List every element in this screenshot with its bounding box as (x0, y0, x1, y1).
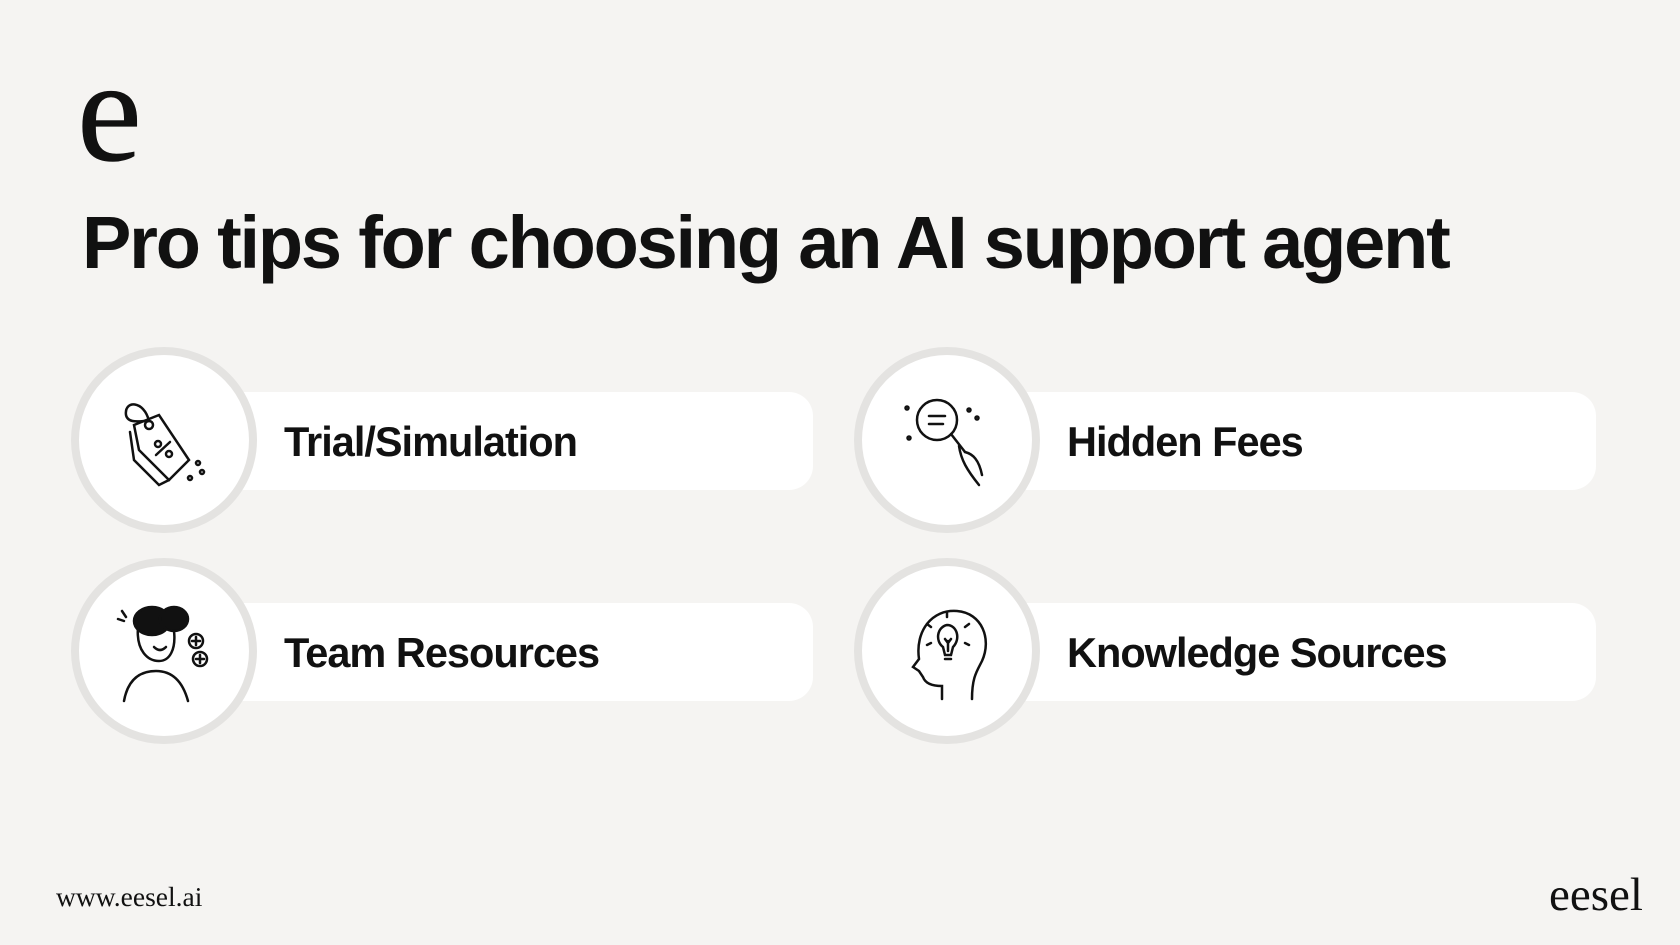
footer: url: www.eesel.ai (56, 881, 202, 912)
icon: person with plus signs (71, 558, 257, 744)
card: Trial/Simulation (71, 347, 813, 533)
icon: head with lightbulb (854, 558, 1040, 744)
label: Knowledge Sources (1067, 629, 1447, 676)
label: Trial/Simulation (284, 418, 577, 465)
footer: brand: eesel (1549, 869, 1643, 921)
card: Knowledge Sources (854, 558, 1596, 744)
icon: price tag (71, 347, 257, 533)
card: Hidden Fees (854, 347, 1596, 533)
logo: e (77, 30, 142, 192)
icon: magnifier with hand (854, 347, 1040, 533)
label: Hidden Fees (1067, 418, 1303, 465)
label: Team Resources (284, 629, 599, 676)
card: Team Resources (71, 558, 813, 744)
title: Pro tips for choosing an AI support agent (82, 201, 1449, 284)
